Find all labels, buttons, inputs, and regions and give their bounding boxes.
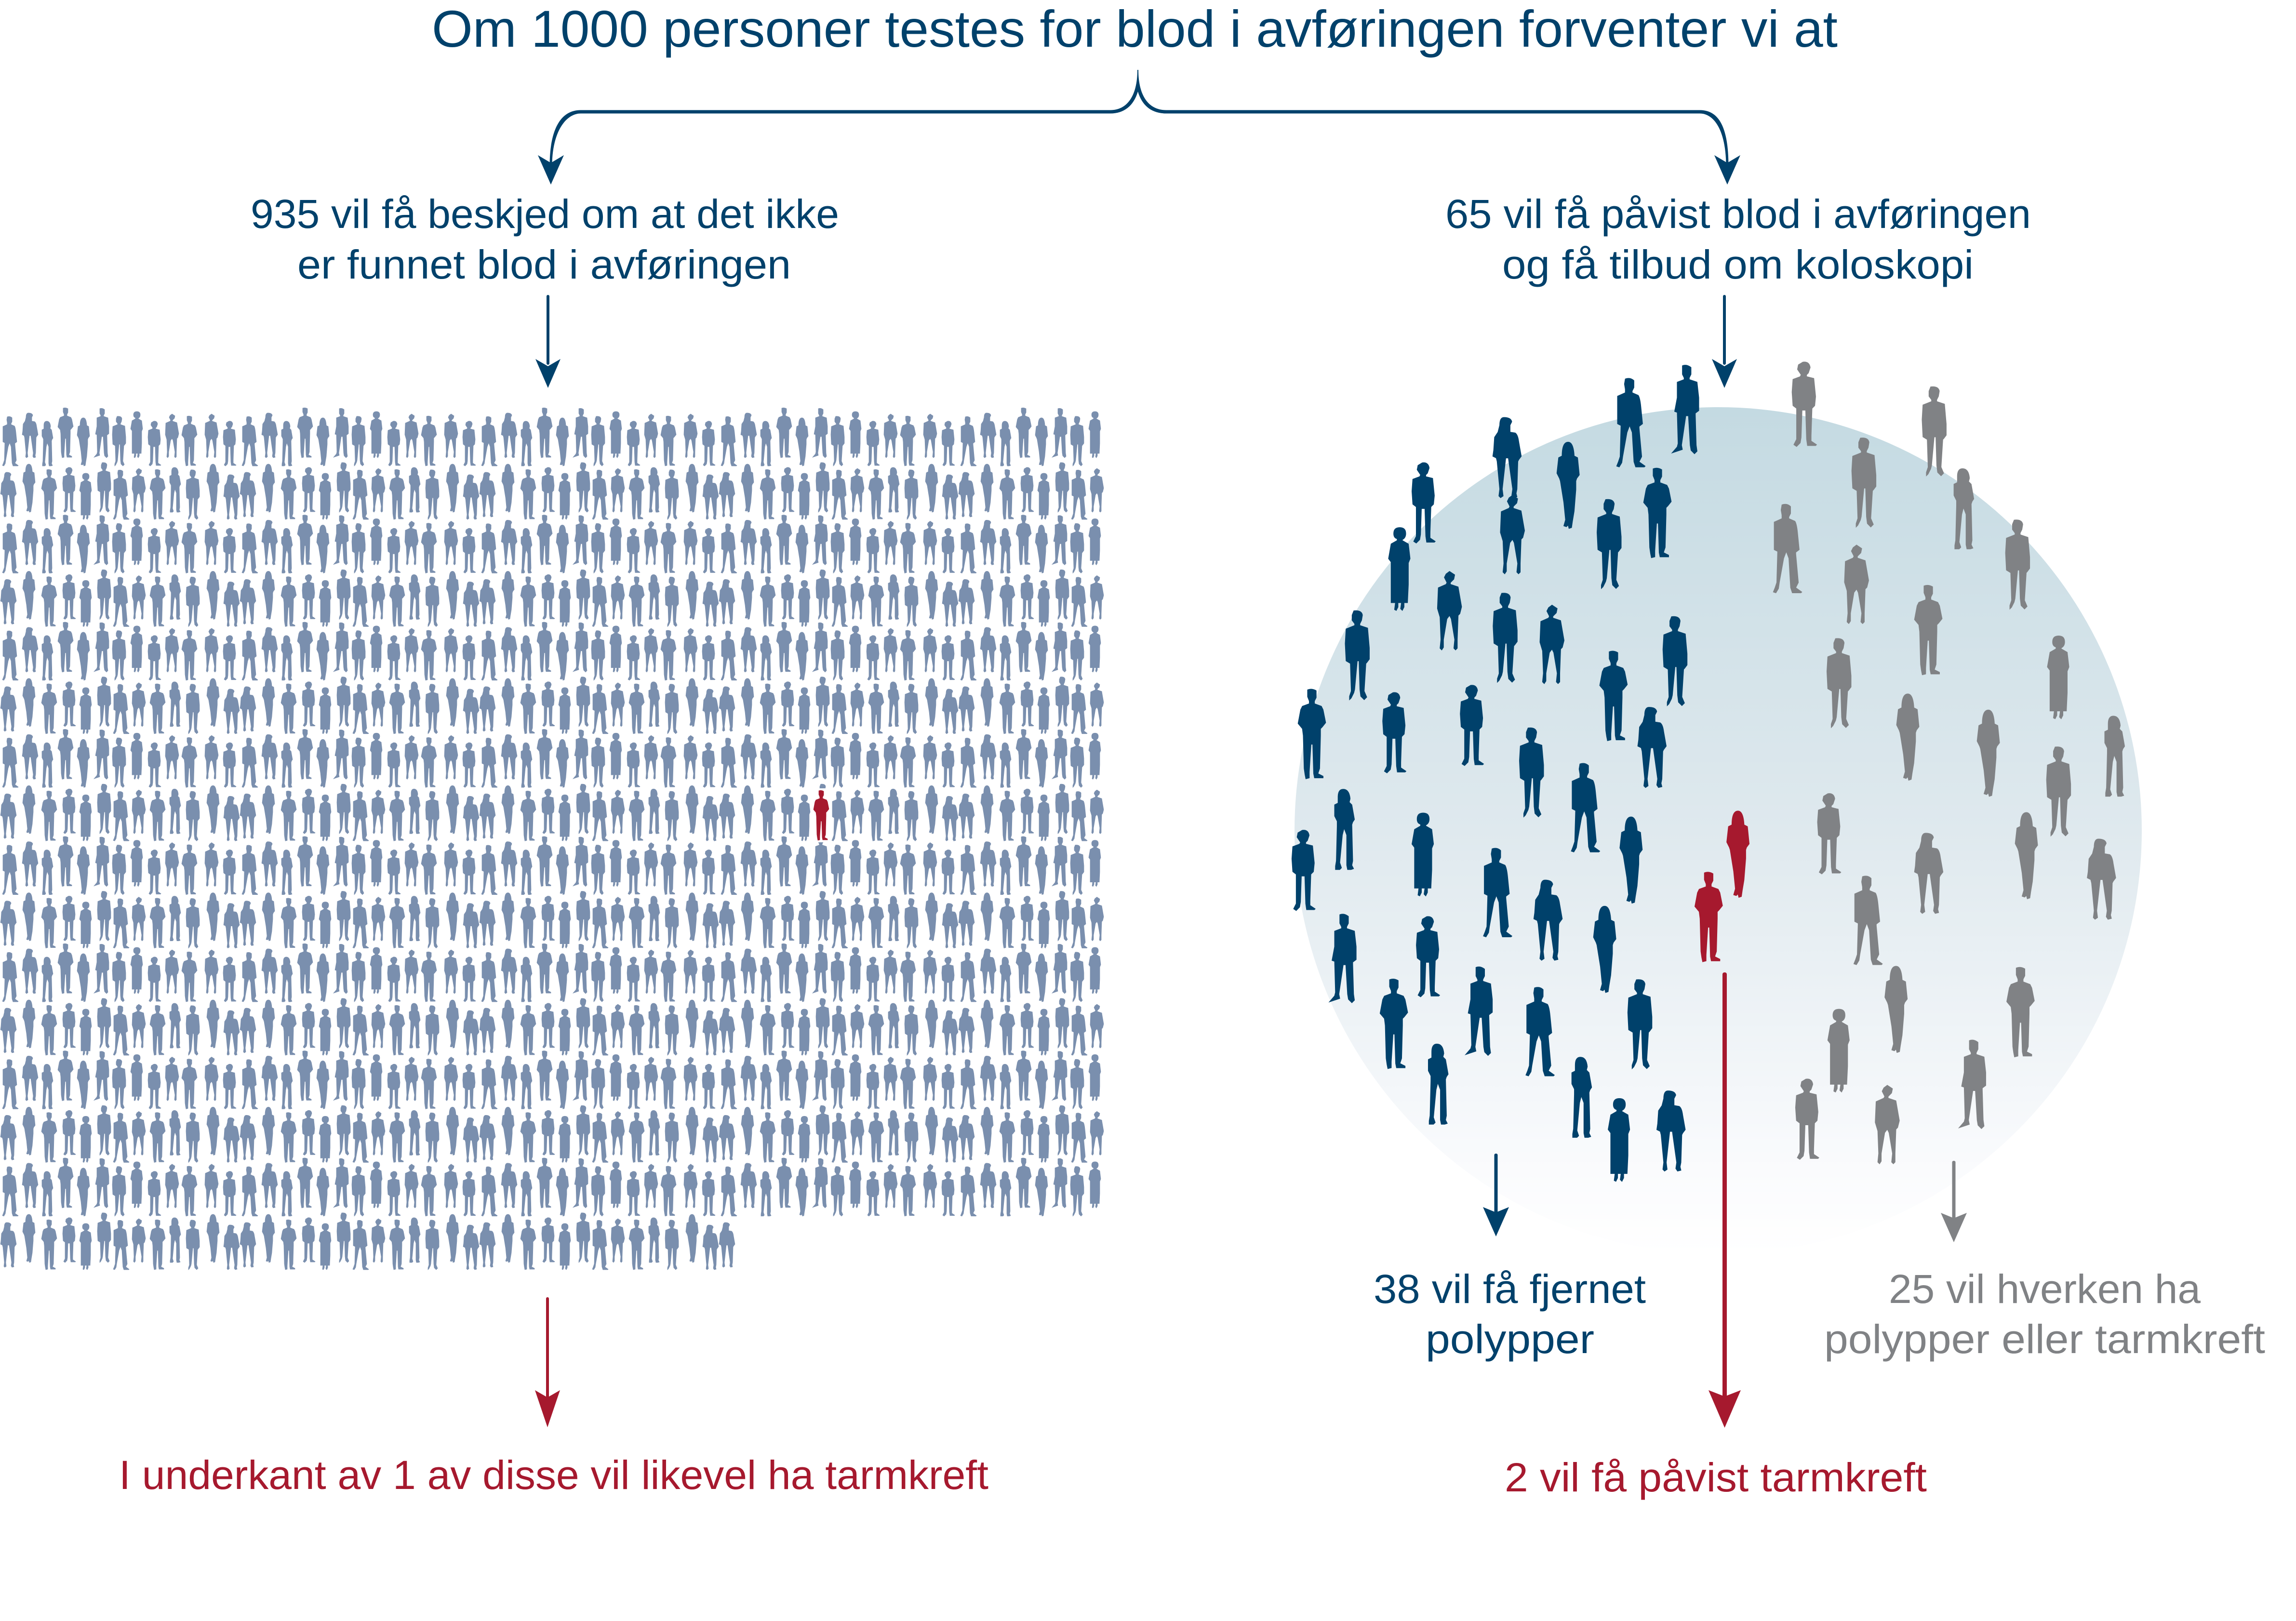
neither text: polypper eller tarmkreft bbox=[1824, 1316, 2265, 1362]
polyps text: 38 vil få fjernet bbox=[1374, 1266, 1646, 1312]
right subheading bbox=[1445, 191, 2031, 287]
red person in crowd bbox=[814, 788, 830, 842]
neither text: 25 vil hverken ha bbox=[1889, 1266, 2201, 1312]
left conclusion text: I underkant av 1 av disse vil likevel ha tarmkreft bbox=[119, 1452, 988, 1498]
arrow: blue to polyps text bbox=[1483, 1154, 1509, 1236]
polyps text: polypper bbox=[1426, 1316, 1594, 1362]
neither text bbox=[1824, 1266, 2265, 1362]
arrow: right subheading to circle bbox=[1712, 295, 1737, 388]
crowd of 935 persons bbox=[0, 408, 1104, 1270]
arrow: grey to neither text bbox=[1941, 1161, 1967, 1242]
arrow: red left to crowd conclusion bbox=[535, 1297, 560, 1427]
right subheading: og få tilbud om koloskopi bbox=[1502, 242, 1974, 287]
left subheading: 935 vil få beskjed om at det ikke bbox=[251, 191, 839, 237]
blue persons: polyps bbox=[1292, 365, 1699, 1182]
title: Om 1000 personer testes for blod i avføringen forventer vi at bbox=[432, 0, 1838, 58]
right subheading: 65 vil få påvist blod i avføringen bbox=[1445, 191, 2031, 237]
arrow: red long to cancer text bbox=[1709, 972, 1741, 1428]
circle background bbox=[1295, 407, 2142, 1254]
left subheading bbox=[251, 191, 839, 287]
red persons: cancer bbox=[1695, 811, 1749, 962]
brace with two arrows bbox=[538, 70, 1740, 185]
left subheading: er funnet blod i avføringen bbox=[297, 242, 791, 287]
polyps text bbox=[1374, 1266, 1646, 1362]
right conclusion text: 2 vil få påvist tarmkreft bbox=[1505, 1455, 1927, 1500]
arrow: left subheading to crowd bbox=[535, 295, 561, 388]
grey persons: neither polyps nor cancer bbox=[1773, 362, 2124, 1164]
